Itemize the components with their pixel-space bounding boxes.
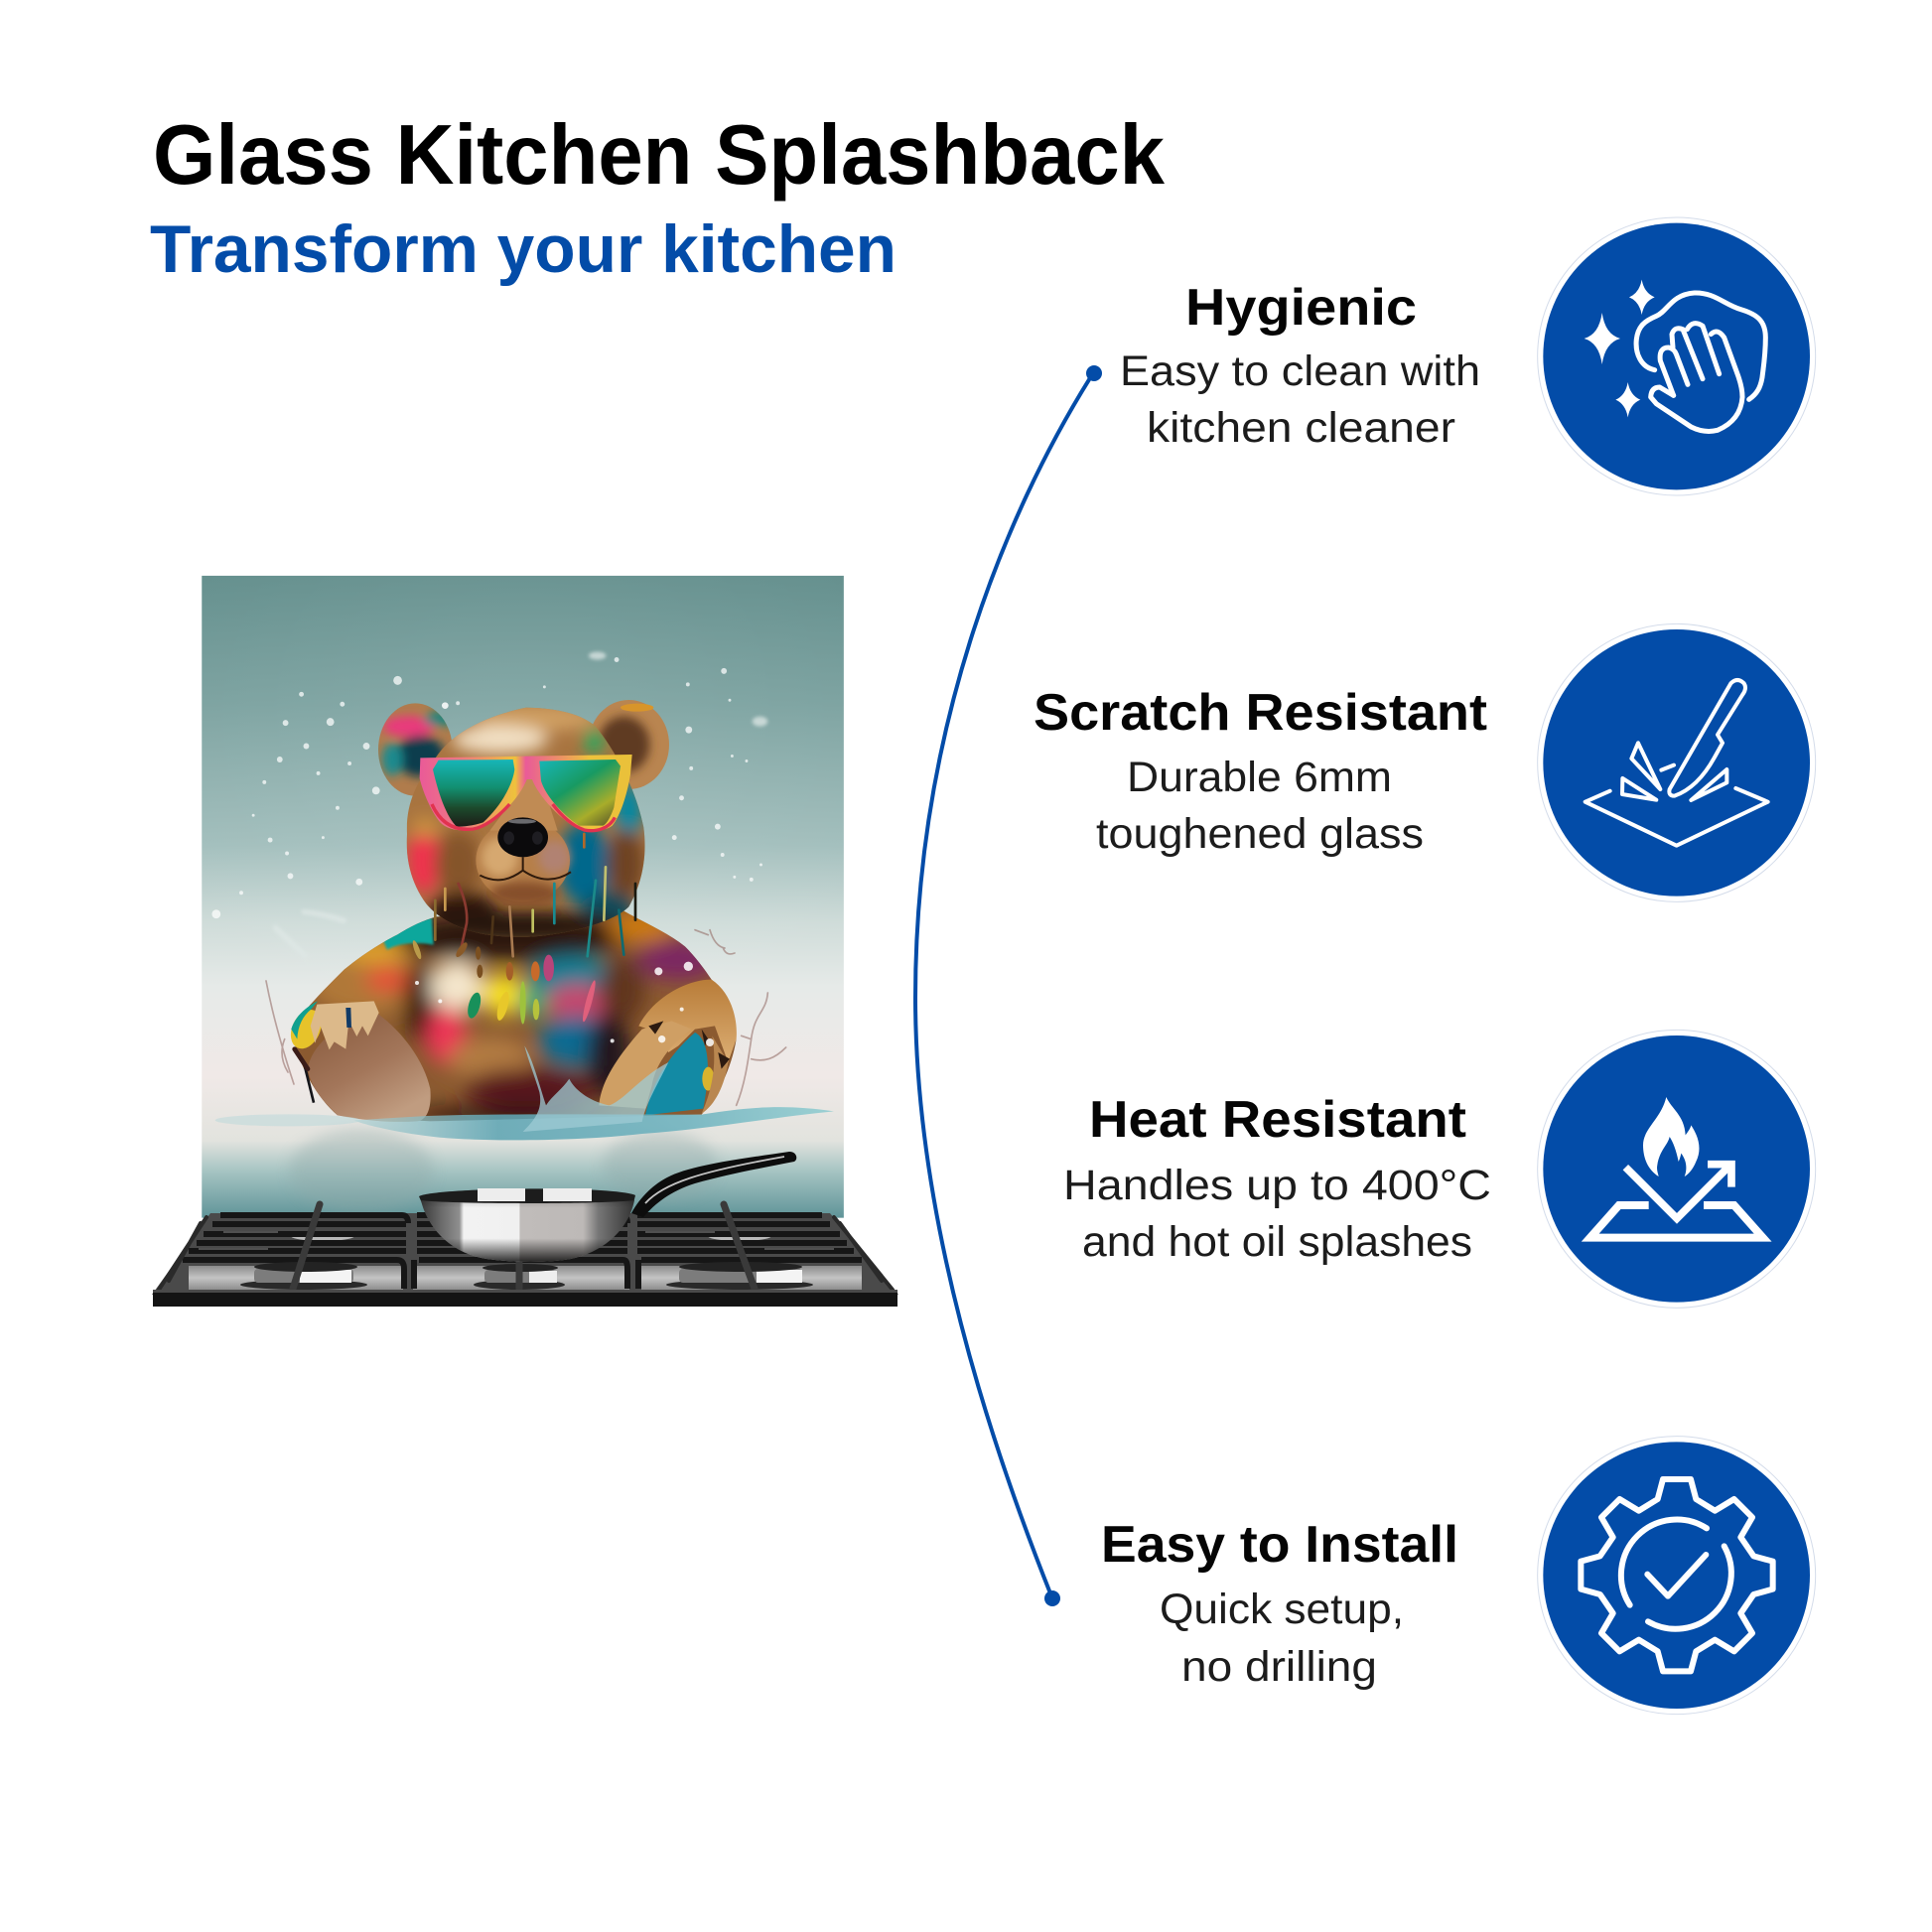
spray drops (415, 702, 714, 1046)
grate bars (183, 1215, 862, 1289)
icon: knife scratching glass (1538, 623, 1816, 901)
connector curve with end dots (915, 365, 1102, 1606)
water drops (211, 657, 762, 918)
water reflections (289, 1129, 718, 1213)
hob (152, 1204, 898, 1307)
sunglasses (420, 755, 632, 831)
panel: splashback background (202, 576, 844, 1218)
head (400, 702, 652, 943)
heading: Heat Resistant (1089, 1091, 1466, 1149)
burners (240, 1262, 813, 1290)
pan handle (631, 1152, 796, 1217)
feature: Heat Resistant: and hot oil splashes (1082, 1218, 1472, 1266)
product image: splashback with hob and pan (152, 576, 898, 1307)
icon: flame over heat-reflecting surface (1538, 1030, 1816, 1308)
water pool (354, 1107, 834, 1140)
mouth (480, 857, 571, 880)
chest drops (411, 939, 598, 1025)
right arm (599, 980, 737, 1115)
bear artwork (215, 700, 834, 1140)
feature: Hygienic (1120, 279, 1480, 452)
pan (419, 1152, 796, 1262)
burner trays (189, 1266, 862, 1290)
icon: gear with check mark (1538, 1437, 1816, 1715)
nose (497, 817, 548, 857)
central splash (523, 1045, 668, 1132)
feature: Scratch Resistant: toughened glass (1096, 810, 1424, 858)
description: Handles up to 400°C (1063, 1162, 1491, 1209)
hob side rails and cross bars (159, 1204, 893, 1290)
feature: Easy to Install (1101, 1516, 1458, 1691)
blurred foam flecks (273, 652, 767, 958)
heading: Scratch Resistant (1034, 684, 1487, 742)
icon: hand wiping with sparkles (1538, 217, 1816, 495)
paint drips (435, 834, 635, 956)
left leg (308, 1011, 431, 1122)
pan interior (419, 1188, 635, 1203)
muzzle (476, 774, 570, 905)
title: Glass Kitchen Splashback (153, 108, 1166, 203)
brown splash strands (266, 930, 786, 1105)
description: Quick setup, (1160, 1586, 1404, 1633)
feature: Easy to Install: no drilling (1181, 1643, 1377, 1691)
description: Easy to clean with (1120, 347, 1480, 395)
feature: Hygienic: kitchen cleaner (1147, 404, 1455, 452)
pan bowl (421, 1200, 634, 1262)
left paw (285, 1001, 379, 1103)
subtitle: Transform your kitchen (150, 211, 897, 287)
rear burners (291, 1231, 771, 1241)
left ear (378, 703, 457, 796)
feature: Scratch Resistant (1034, 684, 1487, 858)
description: Durable 6mm (1127, 754, 1392, 801)
heading: Hygienic (1185, 279, 1417, 337)
feature: Heat Resistant (1063, 1091, 1491, 1266)
right ear (589, 700, 669, 789)
hob front edge (153, 1292, 897, 1307)
heading: Easy to Install (1101, 1516, 1458, 1574)
body (285, 906, 742, 1125)
teal shoulder (382, 917, 434, 950)
